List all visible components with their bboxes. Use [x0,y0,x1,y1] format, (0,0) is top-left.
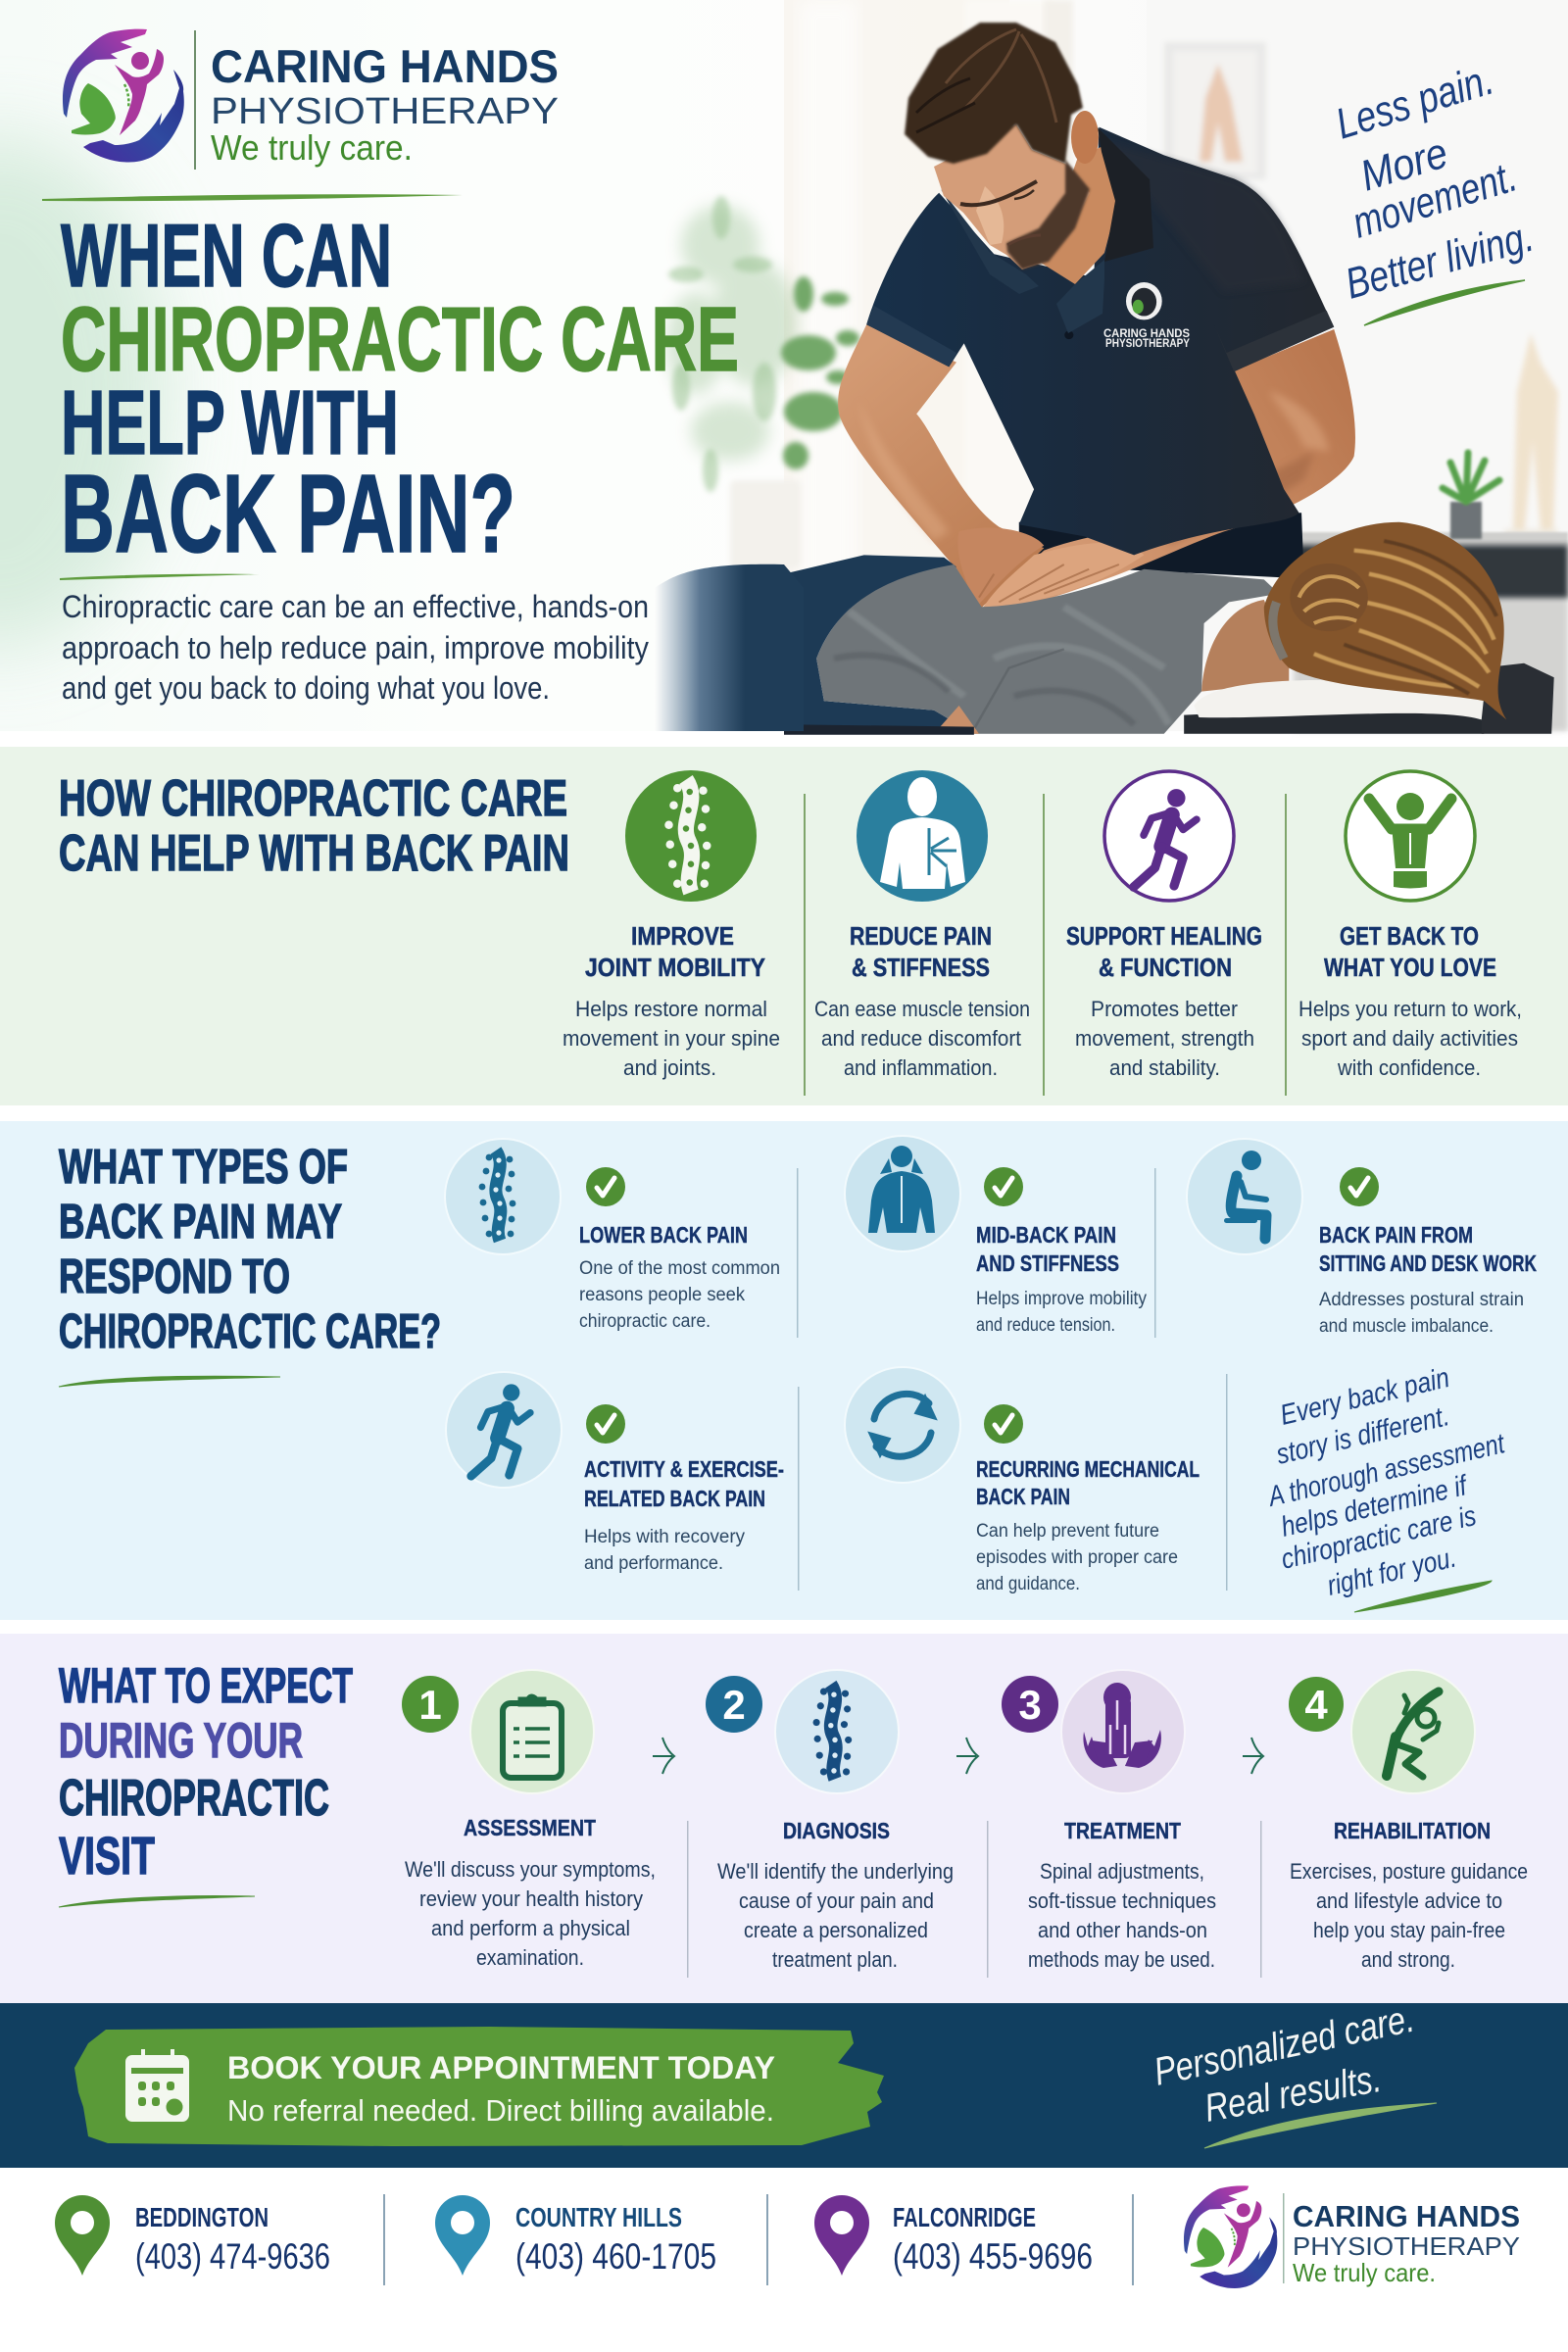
item: mid-back pain [845,1136,1147,1336]
step description: Spinal adjustments, [1040,1859,1204,1884]
icon: spine [625,770,757,902]
item: activity and exercise [446,1372,784,1574]
benefit heading: GET BACK TO [1340,921,1479,951]
item description [1319,1290,1524,1337]
handwritten note: A thorough assessment [1264,1428,1509,1513]
step 2: diagnosis [706,1670,954,1972]
icon: hands and spine [1061,1670,1185,1793]
step description [405,1857,656,1970]
item description: episodes with proper care [976,1547,1178,1568]
benefit heading [585,921,765,982]
step description: and perform a physical [431,1916,630,1940]
section heading [59,1658,353,1886]
step description: treatment plan. [772,1947,898,1972]
benefit description: and inflammation. [844,1055,998,1080]
item description: and guidance. [976,1574,1080,1594]
handwritten tagline: Less pain. [1331,55,1499,149]
benefit description [1298,997,1522,1080]
handwritten note [1264,1362,1509,1602]
step description: examination. [476,1945,584,1970]
section heading: VISIT [59,1827,155,1886]
section heading: DURING YOUR [59,1713,303,1768]
call to action text: BOOK YOUR APPOINTMENT TODAY [227,2050,775,2085]
item description [976,1289,1147,1336]
step description: Exercises, posture guidance [1290,1859,1528,1884]
location name: BEDDINGTON [135,2202,269,2232]
benefit heading: REDUCE PAIN [850,921,992,951]
section heading [59,770,569,882]
logo wordmark: PHYSIOTHERAPY [211,91,559,132]
phone number: (403) 474-9636 [135,2236,330,2277]
item description [579,1258,780,1332]
item heading: RELATED BACK PAIN [584,1486,765,1511]
logo [63,29,559,170]
item description: Addresses postural strain [1319,1290,1524,1310]
number badge: 3 [1018,1682,1042,1728]
item: lower back pain [445,1139,780,1332]
section heading [59,1141,441,1358]
icon: calendar [125,2049,189,2122]
benefit description: sport and daily activities [1301,1026,1518,1051]
patient legs fading into background [655,564,804,731]
icon: stretching figure [1351,1670,1475,1793]
item heading [1319,1222,1537,1276]
footer: locations [55,2185,1520,2288]
item heading [976,1222,1119,1276]
call to action banner [0,1997,1568,2168]
item heading: MID-BACK PAIN [976,1222,1116,1248]
logo wordmark: PHYSIOTHERAPY [1293,2231,1520,2261]
logo mark [63,29,184,162]
step description: methods may be used. [1028,1947,1215,1972]
item description: and reduce tension. [976,1315,1115,1336]
benefit heading: IMPROVE [631,921,734,951]
location name: FALCONRIDGE [893,2202,1036,2232]
benefit description: and joints. [623,1055,716,1080]
handwritten note: chiropractic care is [1278,1500,1479,1576]
phone number: (403) 460-1705 [515,2236,716,2277]
number badge: 2 [722,1682,746,1728]
benefit description [563,997,780,1080]
item description: and performance. [584,1553,723,1574]
item heading [584,1456,784,1511]
panel: how chiropractic care can help [0,747,1568,1105]
step heading: TREATMENT [1064,1818,1181,1843]
handwritten slogan: Real results. [1201,2057,1385,2131]
footer logo [1184,2185,1520,2288]
accent stroke [59,1895,255,1907]
item heading: ACTIVITY & EXERCISE- [584,1456,784,1482]
physiotherapist and patient illustration [784,127,1554,735]
step description [717,1859,954,1972]
main title: WHEN CAN [61,207,392,306]
item description: and muscle imbalance. [1319,1316,1494,1337]
step 1: assessment [402,1670,656,1970]
hero photo: treatment room with physiotherapist and patient [0,0,1568,735]
handwritten note: right for you. [1324,1542,1459,1602]
accent stroke [60,574,260,580]
step description: help you stay pain-free [1313,1918,1505,1942]
item description [584,1527,745,1574]
section heading: RESPOND TO [59,1250,290,1303]
benefit heading: & STIFFNESS [852,953,990,982]
item description: chiropractic care. [579,1311,710,1332]
logo wordmark: We truly care. [211,127,413,168]
item description [976,1521,1178,1594]
icon: spine [445,1139,561,1254]
step heading: ASSESSMENT [464,1815,596,1840]
benefit: reduce pain and stiffness [814,770,1030,1080]
location name: COUNTRY HILLS [515,2202,682,2232]
location: Falconridge [814,2195,1093,2277]
check mark [586,1404,625,1444]
item description: Helps with recovery [584,1527,745,1547]
check mark [984,1167,1023,1206]
number badge [1289,1677,1344,1732]
step 4: rehabilitation [1289,1670,1528,1972]
benefit description: and stability. [1109,1055,1220,1080]
item description: Helps improve mobility [976,1289,1147,1309]
intro paragraph: approach to help reduce pain, improve mobility [62,630,649,665]
section heading: CHIROPRACTIC [59,1770,329,1827]
handwritten slogan [1151,1997,1418,2131]
intro paragraph: and get you back to doing what you love. [62,670,550,706]
arrow [653,1738,674,1774]
section heading: BACK PAIN MAY [59,1196,342,1249]
item heading: LOWER BACK PAIN [579,1222,748,1248]
accent stroke [42,194,463,201]
main title: CHIROPRACTIC CARE [61,288,739,390]
step 3: treatment [1002,1670,1216,1972]
handwritten tagline [1331,55,1539,309]
section heading: WHAT TYPES OF [59,1141,348,1194]
green brush button [74,2027,884,2146]
intro paragraph: Chiropractic care can be an effective, hands-on [62,589,649,624]
icon: map pin [814,2195,869,2276]
shirt logo text [1103,326,1190,350]
item heading: RECURRING MECHANICAL [976,1456,1200,1482]
step description: We'll discuss your symptoms, [405,1857,656,1882]
icon: person arms raised [1346,771,1475,901]
arrow [1243,1738,1263,1774]
benefit: support healing and function [1066,771,1262,1080]
item heading: AND STIFFNESS [976,1250,1119,1276]
icon: clipboard [470,1670,594,1793]
accent stroke [1364,280,1525,325]
hero panel [0,0,1568,735]
benefit description [814,997,1030,1080]
physiotherapist head [905,23,1153,333]
logo wordmark [211,40,559,168]
phone number: (403) 455-9696 [893,2236,1093,2277]
benefit description: Helps restore normal [575,997,767,1021]
logo mark [1184,2185,1277,2288]
icon: upper body [845,1136,960,1251]
accent stroke [1354,1581,1492,1612]
item: recurring mechanical back pain [845,1367,1200,1594]
benefit heading: WHAT YOU LOVE [1324,953,1496,982]
icon: map pin [55,2195,110,2276]
step description: cause of your pain and [739,1888,934,1913]
handwritten tagline: More [1355,128,1453,201]
handwritten note: story is different. [1273,1400,1452,1471]
section heading: CHIROPRACTIC CARE? [59,1305,441,1358]
icon: runner [446,1372,562,1488]
step description [1290,1859,1528,1972]
step description: and lifestyle advice to [1316,1888,1502,1913]
benefit description: movement, strength [1075,1026,1254,1051]
step description: and strong. [1361,1947,1455,1972]
icon: map pin [435,2195,490,2276]
shirt logo text: PHYSIOTHERAPY [1105,336,1190,350]
benefit heading [1066,921,1262,982]
item heading: BACK PAIN [976,1484,1070,1509]
logo divider [194,30,196,170]
check mark [1340,1167,1379,1206]
step heading: DIAGNOSIS [783,1818,890,1843]
step description: We'll identify the underlying [717,1859,954,1884]
benefit description: movement in your spine [563,1026,780,1051]
item description: reasons people seek [579,1285,745,1305]
icon: spine [775,1670,899,1793]
intro paragraph [62,589,649,706]
panel: what to expect [0,1634,1568,2003]
logo wordmark: We truly care. [1293,2258,1436,2287]
handwritten note: helps determine if [1278,1470,1472,1544]
benefit description: Helps you return to work, [1298,997,1522,1021]
step description: review your health history [419,1886,643,1911]
item heading: BACK PAIN FROM [1319,1222,1473,1248]
handwritten tagline: movement. [1348,152,1522,248]
location: Beddington [55,2195,330,2277]
benefit heading [850,921,992,982]
number badge [706,1676,762,1733]
arrow [956,1738,978,1774]
check mark [586,1167,625,1206]
benefit heading [1324,921,1496,982]
section heading: HOW CHIROPRACTIC CARE [59,770,567,827]
panel: types of back pain [0,1121,1568,1620]
icon: seated person [1187,1139,1302,1254]
main title: HELP WITH [61,371,399,473]
call to action text: No referral needed. Direct billing available. [227,2093,774,2128]
main title [61,207,739,575]
logo wordmark: CARING HANDS [1293,2199,1520,2233]
item: sitting and desk work [1187,1139,1537,1337]
benefit description: Can ease muscle tension [814,997,1030,1021]
section heading: CAN HELP WITH BACK PAIN [59,825,569,882]
shirt logo text: CARING HANDS [1103,326,1190,340]
step description: soft-tissue techniques [1028,1888,1216,1913]
benefit description: Promotes better [1091,997,1238,1021]
number badge: 1 [418,1682,442,1728]
step description: and other hands-on [1038,1918,1207,1942]
benefit description [1075,997,1254,1080]
logo wordmark: CARING HANDS [211,40,559,92]
step heading: REHABILITATION [1334,1818,1491,1843]
number badge [402,1676,459,1733]
icon: runner [1104,771,1234,901]
location: Country Hills [435,2195,716,2277]
benefit description: and reduce discomfort [821,1026,1021,1051]
accent stroke [59,1376,280,1387]
logo wordmark [1293,2199,1520,2287]
benefit description: with confidence. [1337,1055,1481,1080]
step description: create a personalized [744,1918,928,1942]
icon: recurring arrows [845,1367,960,1483]
main title: BACK PAIN? [61,452,515,575]
item description: One of the most common [579,1258,780,1279]
step description [1028,1859,1216,1972]
section heading: WHAT TO EXPECT [59,1658,353,1713]
item description: Can help prevent future [976,1521,1159,1542]
benefit: improve joint mobility [563,770,780,1080]
accent stroke [1204,2103,1437,2148]
icon: back pain body [857,770,988,902]
check mark [984,1404,1023,1444]
handwritten note: Every back pain [1277,1362,1452,1432]
number badge [1002,1676,1058,1733]
call to action text [227,2050,775,2128]
handwritten slogan: Personalized care. [1151,1997,1418,2094]
benefit heading: SUPPORT HEALING [1066,921,1262,951]
item heading [976,1456,1200,1509]
number badge: 4 [1304,1682,1328,1728]
benefit heading: JOINT MOBILITY [585,953,765,982]
benefit: get back to what you love [1298,771,1522,1080]
benefit heading: & FUNCTION [1099,953,1232,982]
